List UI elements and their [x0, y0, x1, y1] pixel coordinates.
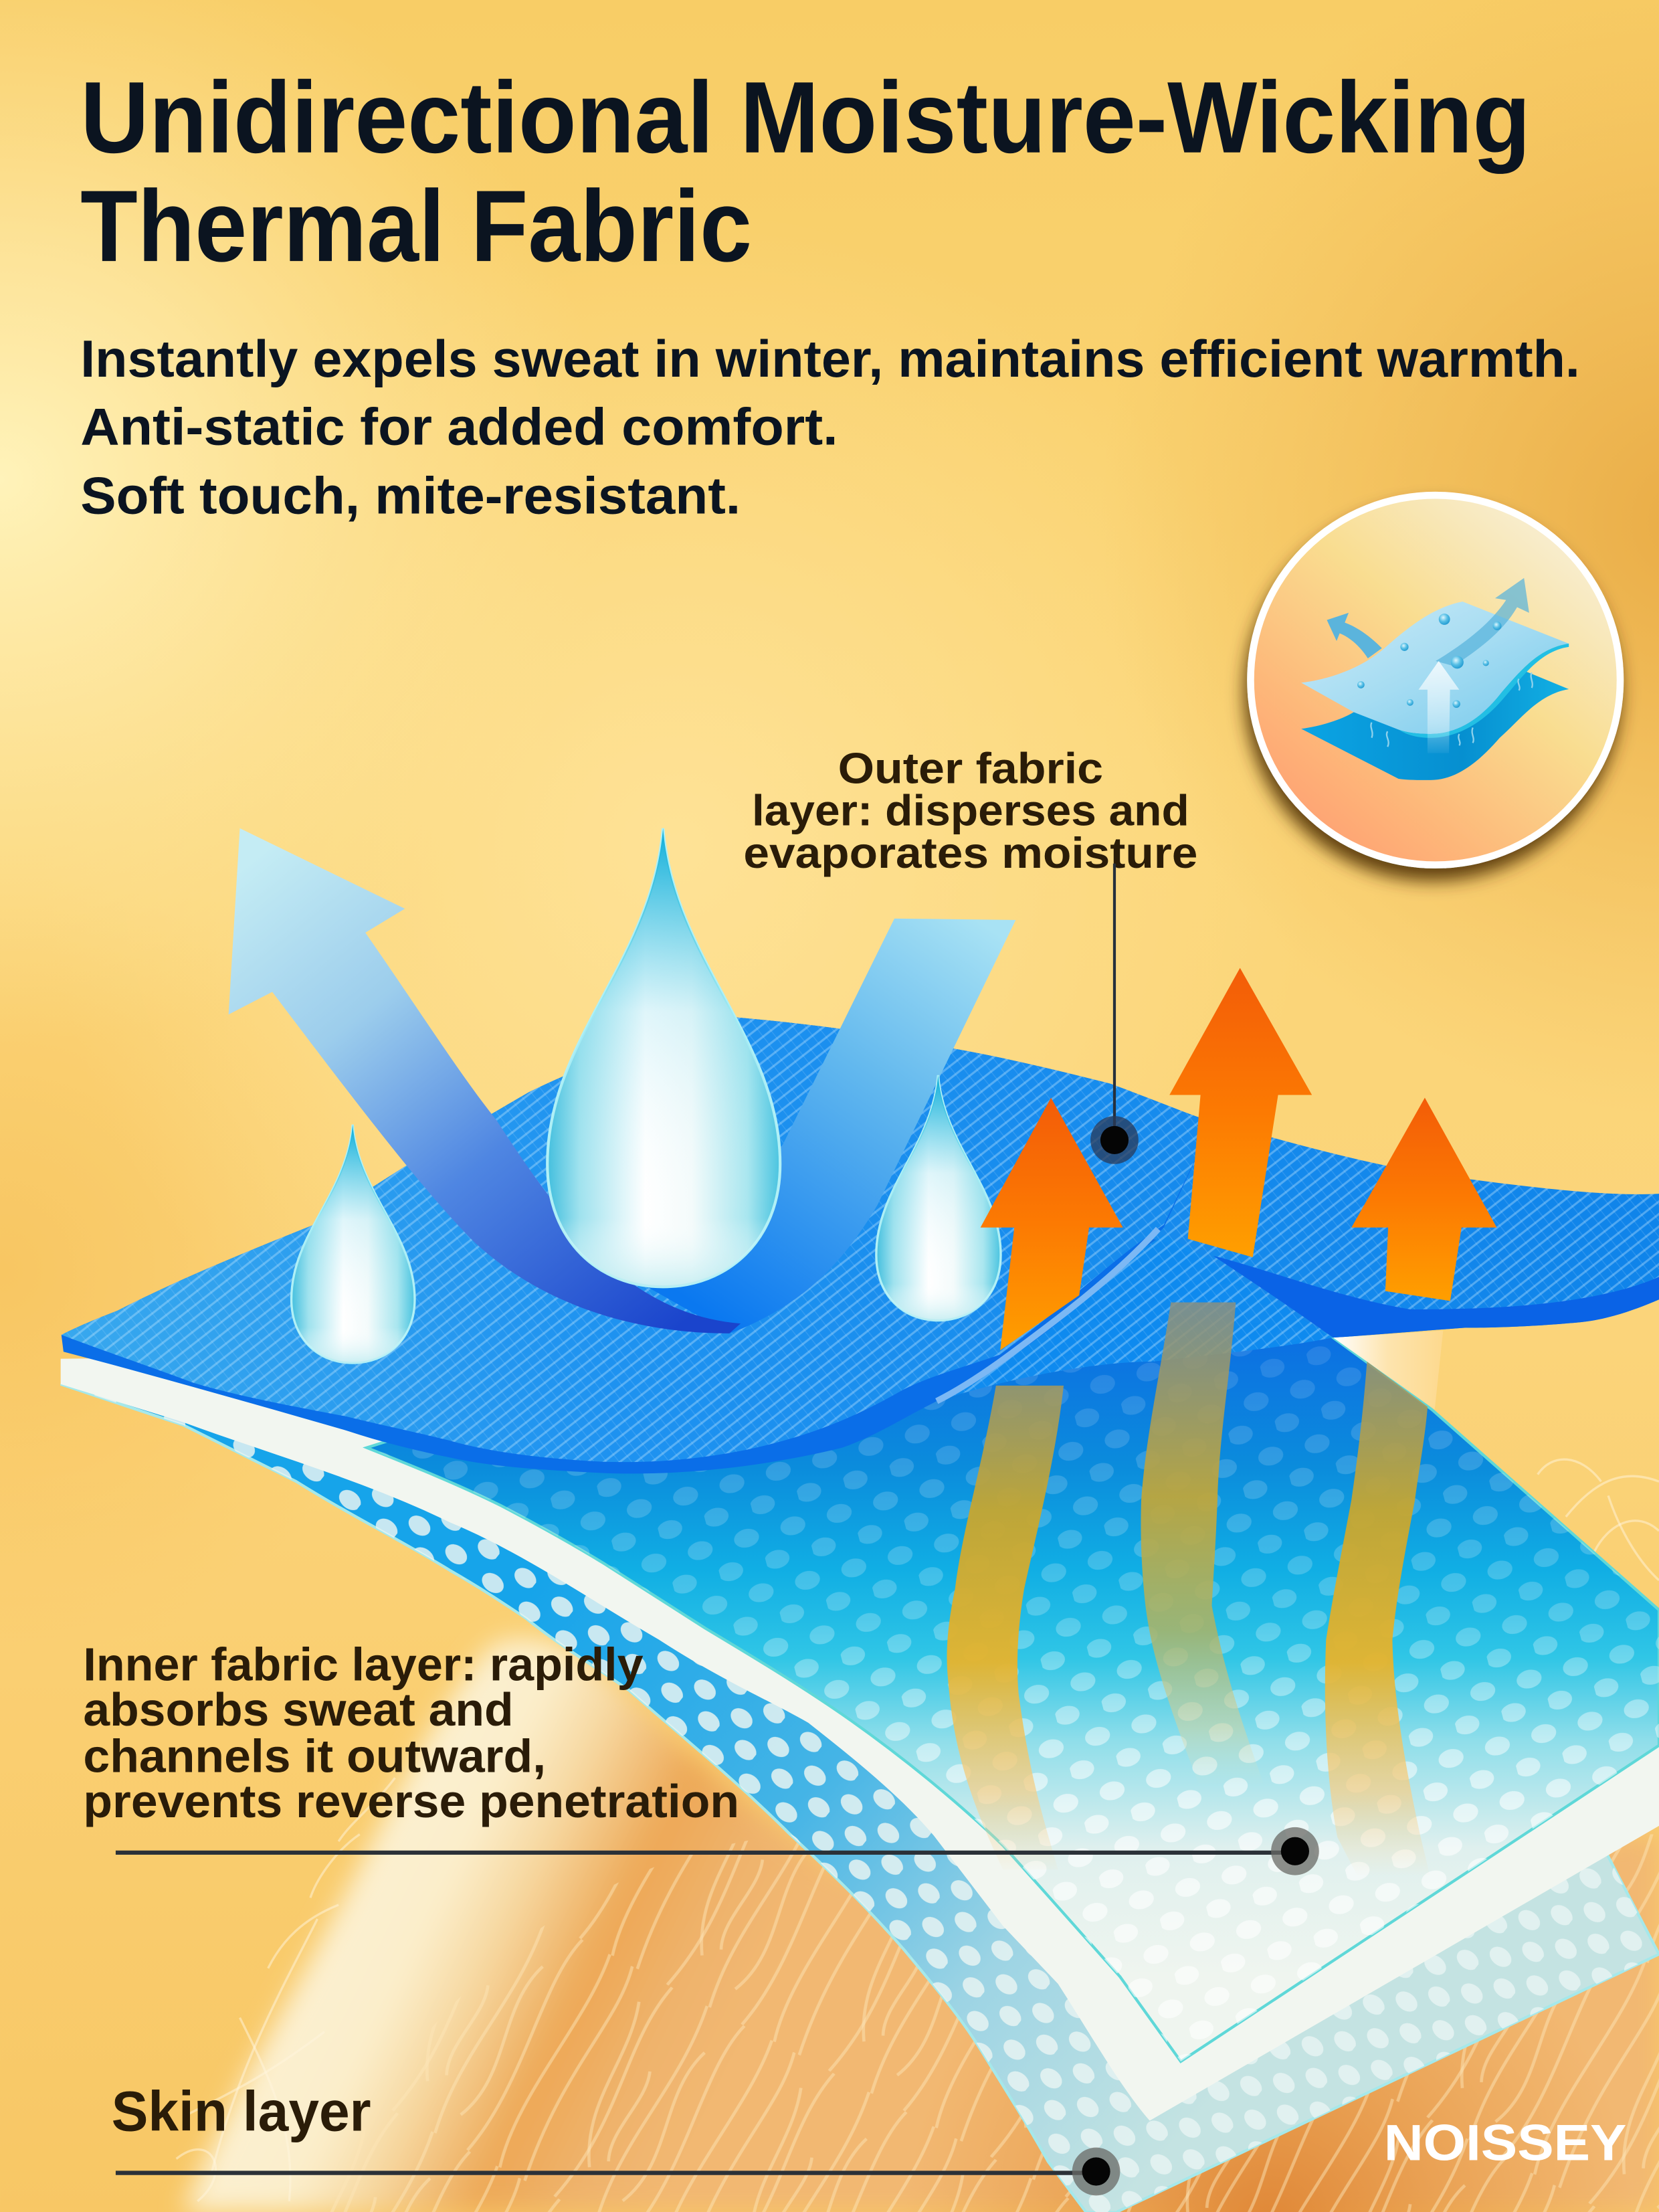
label: skin layer: Skin layer	[112, 2080, 371, 2142]
label: outer fabric layer	[743, 743, 1197, 877]
label: inner fabric layer	[83, 1639, 739, 1827]
label: inner fabric layer: channels it outward,	[83, 1730, 546, 1782]
leader: inner fabric layer	[116, 1827, 1319, 1875]
subtitle benefits	[80, 329, 1580, 525]
orange heat arrows	[981, 968, 1496, 1350]
leader: outer fabric layer	[1090, 864, 1139, 1164]
outer fabric right fold	[987, 1079, 1659, 1338]
curved blue arrow	[229, 828, 1015, 1333]
title	[80, 62, 1531, 283]
label: inner fabric layer: prevents reverse penetration	[83, 1775, 739, 1827]
badge: fabric layers icon	[1250, 495, 1620, 865]
white fabric border sheet	[61, 1228, 1659, 2121]
translucent fabric fold	[937, 1234, 1333, 1401]
leader: skin layer	[116, 2148, 1120, 2195]
label: inner fabric layer: Inner fabric layer: rapidly	[83, 1639, 644, 1691]
skin layer fur	[177, 1459, 1659, 2212]
back fabric sheet	[61, 1384, 1659, 2212]
title: Unidirectional Moisture-Wicking	[80, 62, 1531, 175]
subtitle benefits: Instantly expels sweat in winter, maintains efficient warmth.	[80, 329, 1580, 388]
label: outer fabric layer: evaporates moisture	[743, 828, 1197, 877]
pale streak above fabric edge	[1333, 1331, 1443, 1410]
outer fabric front layer	[62, 1016, 1213, 1473]
subtitle benefits: Anti-static for added comfort.	[80, 397, 838, 456]
brand logo: NOISSEY	[1384, 2115, 1626, 2172]
label: inner fabric layer: absorbs sweat and	[83, 1683, 514, 1736]
subtitle benefits: Soft touch, mite-resistant.	[80, 466, 741, 525]
water droplets	[292, 828, 1001, 1363]
title: Thermal Fabric	[80, 170, 752, 283]
label: outer fabric layer: Outer fabric	[838, 743, 1103, 792]
heat streaks	[947, 1302, 1432, 1883]
label: outer fabric layer: layer: disperses and	[752, 786, 1189, 835]
inner fabric sheet	[367, 1214, 1659, 2061]
